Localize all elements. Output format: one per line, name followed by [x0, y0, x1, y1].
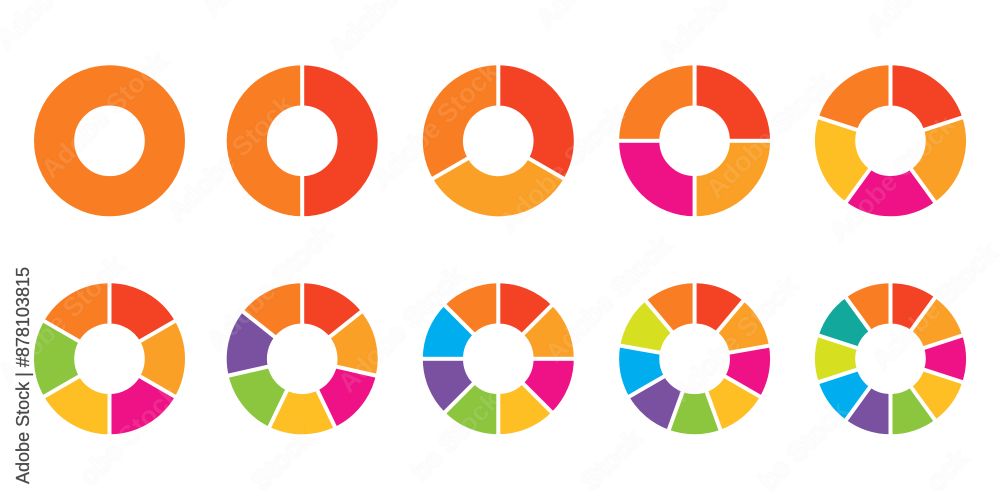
donut: 7 segments [224, 280, 380, 437]
watermark pattern: Adobe Stock [539, 230, 678, 368]
donut: 9 segments [616, 280, 773, 437]
watermark pattern: Adobe Stock [201, 218, 340, 356]
watermark pattern: Adobe Stock [666, 270, 805, 408]
watermark pattern: Adobe Stock [332, 260, 471, 398]
watermark pattern: Adobe Stock [823, 109, 962, 247]
watermark pattern: Adobe Stock [35, 46, 174, 184]
watermark pattern: obe Stock [73, 378, 186, 491]
donut: 6 segments [34, 280, 185, 438]
watermark pattern: Stock [575, 422, 649, 496]
donut: 3 segments [423, 62, 574, 216]
donut: 8 segments [419, 280, 577, 438]
watermark pattern: Adobe Stock [161, 89, 300, 227]
watermark pattern: Adobe Stock [700, 66, 839, 204]
vertical stock credit text: Adobe Stock | #878103815 [13, 267, 33, 484]
watermark pattern: be Stock [753, 395, 855, 496]
watermark pattern: Adobe Stock [866, 237, 1000, 375]
watermark pattern: Stock [245, 422, 319, 496]
watermark pattern: Adobe Stock [493, 99, 632, 237]
watermark pattern: ock [920, 442, 975, 497]
watermark pattern: be Stock [405, 385, 507, 486]
donut: 1 segment [54, 85, 165, 196]
donut: 5 segments [813, 62, 968, 218]
watermark pattern: Adobe Stock [366, 56, 505, 194]
donut: 2 segments [247, 62, 358, 220]
donut: 10 segments [813, 280, 968, 438]
donut: 4 segments [616, 62, 774, 220]
